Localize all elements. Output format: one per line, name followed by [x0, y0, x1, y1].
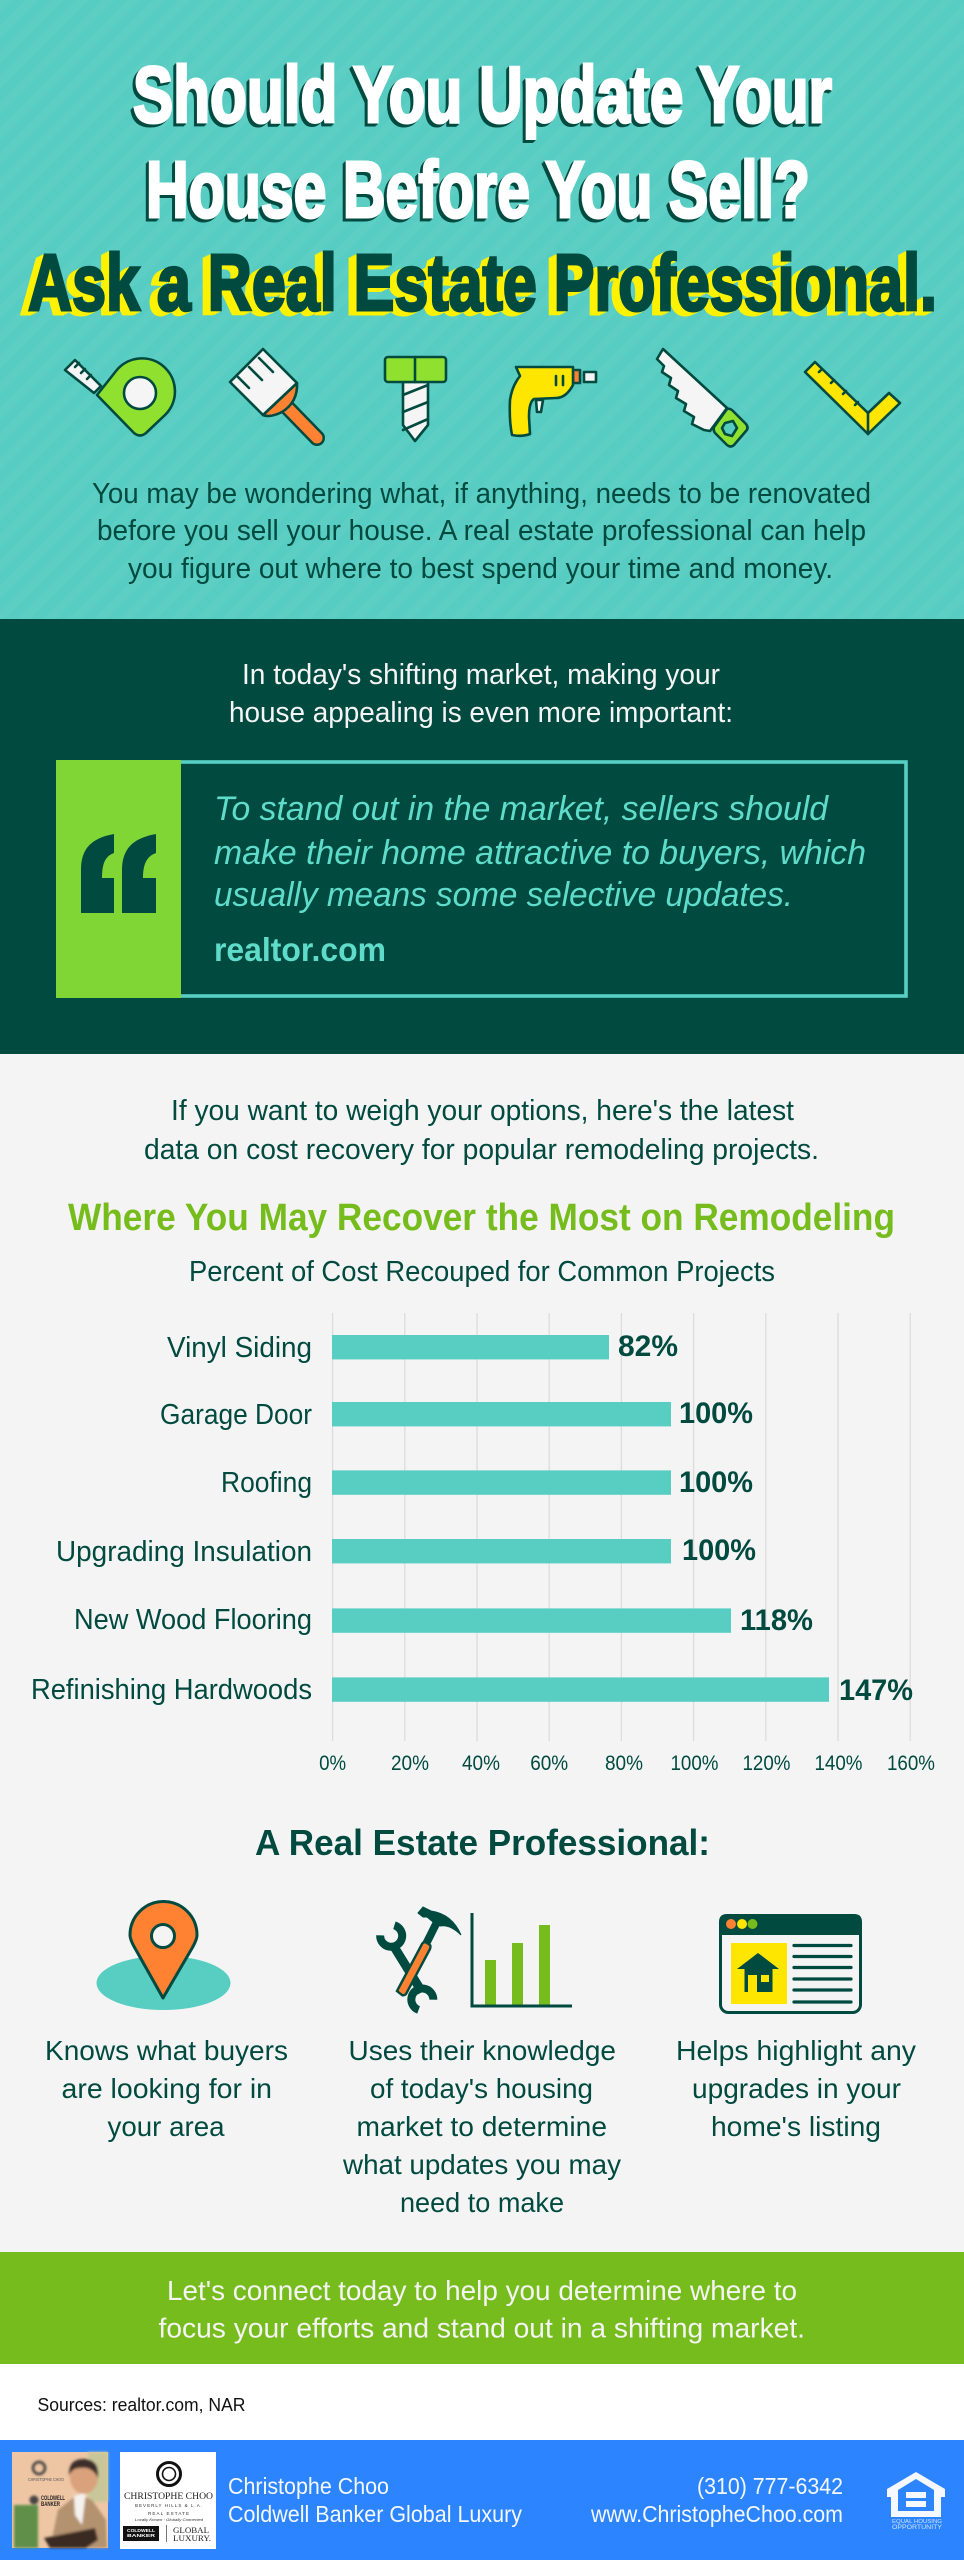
contact details: www.ChristopheChoo.com: [590, 2501, 843, 2527]
quote intro text: house appealing is even more important:: [229, 697, 733, 729]
text: helps highlight: Helps highlight any: [676, 2035, 916, 2066]
bar chart: Upgrading Insulation: [56, 1536, 312, 1568]
icon: equal housing opportunity: EQUAL HOUSING: [892, 2519, 942, 2525]
quote source: realtor.com: [214, 931, 386, 968]
bar chart: 140%: [814, 1751, 862, 1775]
logo card: CHRISTOPHE CHOO: [124, 2491, 214, 2501]
data intro text: [144, 1095, 819, 1166]
quote text: usually means some selective updates.: [214, 876, 793, 914]
logo card: BEVERLY HILLS & L.A.: [135, 2503, 202, 2508]
panel: data and benefits: [0, 1054, 964, 2252]
logo card: Locally Known · Globally Connected: [135, 2518, 204, 2522]
panel: header: [0, 0, 964, 619]
quote intro text: [229, 659, 733, 729]
agent name: [228, 2473, 522, 2527]
chart title: Where You May Recover the Most on Remodeling: [68, 1197, 895, 1239]
bar chart: 100%: [670, 1751, 718, 1775]
icon: browser listing: [719, 1914, 862, 2012]
agent photo: BANKER: [41, 2501, 60, 2508]
bar chart: Garage Door: [160, 1399, 312, 1431]
icon: hand saw: [657, 349, 748, 446]
icon: screw: [385, 357, 446, 441]
intro paragraph: you figure out where to best spend your time and money.: [128, 553, 833, 585]
data intro text: If you want to weigh your options, here's the latest: [171, 1095, 794, 1127]
panel: sources: [0, 2364, 964, 2440]
bar chart: 80%: [605, 1751, 643, 1775]
bar chart: 147%: [839, 1674, 913, 1707]
chart subtitle: Percent of Cost Recouped for Common Projects: [189, 1256, 775, 1288]
text: knows what buyers: your area: [108, 2111, 225, 2142]
logo card: BANKER: [127, 2533, 156, 2538]
text: knows what buyers: Knows what buyers: [45, 2035, 288, 2066]
text: uses their knowledge: need to make: [400, 2187, 564, 2218]
bar chart: 100%: [682, 1534, 756, 1567]
bar chart: [31, 1313, 935, 1775]
contact details: [590, 2473, 843, 2527]
icon: equal housing opportunity: [887, 2472, 945, 2531]
logo card: REAL ESTATE: [148, 2511, 189, 2516]
bar chart: 160%: [887, 1751, 935, 1775]
panel: footer: [0, 2440, 964, 2560]
contact details: (310) 777-6342: [697, 2473, 843, 2499]
quote intro text: In today's shifting market, making your: [242, 659, 720, 691]
panel: call to action: Let's connect today to help you determine where to: [167, 2275, 797, 2306]
agent photo: [12, 2452, 108, 2548]
quote text: To stand out in the market, sellers should: [214, 790, 829, 828]
agent name: Coldwell Banker Global Luxury: [228, 2501, 522, 2527]
agent photo: COLDWELL: [41, 2495, 65, 2502]
icon: carpenter square: [805, 362, 900, 434]
bar chart: Vinyl Siding: [167, 1332, 312, 1364]
heading: a real estate professional: A Real Estate Professional:: [255, 1822, 710, 1863]
text: knows what buyers: [45, 2035, 288, 2142]
bar chart: 100%: [679, 1397, 753, 1430]
bar chart: 100%: [679, 1466, 753, 1499]
quote text: [214, 790, 866, 914]
panel: call to action: focus your efforts and stand out in a shifting market.: [158, 2312, 805, 2344]
logo card: [120, 2452, 216, 2549]
bar chart: New Wood Flooring: [74, 1604, 312, 1636]
text: uses their knowledge: what updates you may: [342, 2149, 621, 2180]
intro paragraph: [92, 478, 871, 585]
logo card: GLOBAL: [173, 2526, 209, 2535]
text: uses their knowledge: market to determine: [356, 2111, 607, 2142]
text: uses their knowledge: [342, 2035, 621, 2218]
bar chart: Roofing: [221, 1467, 312, 1499]
text: helps highlight: home's listing: [711, 2111, 881, 2142]
text: uses their knowledge: of today's housing: [370, 2073, 593, 2104]
data intro text: data on cost recovery for popular remodeling projects.: [144, 1134, 819, 1166]
bar chart: 120%: [742, 1751, 790, 1775]
text: helps highlight: [676, 2035, 916, 2142]
quote text: make their home attractive to buyers, which: [214, 834, 866, 872]
text: uses their knowledge: Uses their knowledge: [348, 2035, 616, 2066]
logo card: LUXURY.: [173, 2534, 211, 2543]
panel: sources: Sources: realtor.com, NAR: [38, 2395, 246, 2415]
logo card: COLDWELL: [127, 2528, 155, 2533]
panel: call to action: [0, 2252, 964, 2364]
icon: location pin: [96, 1902, 230, 2010]
panel: quote section: [0, 619, 964, 1054]
bar chart: 82%: [618, 1330, 678, 1363]
bar chart: 118%: [740, 1604, 813, 1637]
intro paragraph: before you sell your house. A real estate professional can help: [97, 515, 866, 547]
icon: quotation marks: [81, 834, 156, 913]
icon: equal housing opportunity: OPPORTUNITY: [892, 2525, 942, 2531]
bar chart: Refinishing Hardwoods: [31, 1674, 312, 1706]
bar chart: 0%: [319, 1751, 346, 1775]
icon: tools and bar chart: [379, 1907, 572, 2011]
icon: measuring tape: [65, 358, 175, 436]
callout: quote box: [56, 760, 906, 998]
bar chart: 40%: [462, 1751, 500, 1775]
intro paragraph: You may be wondering what, if anything, needs to be renovated: [92, 478, 871, 510]
bar chart: 20%: [391, 1751, 429, 1775]
agent photo: CHRISTOPHE CHOO: [28, 2477, 64, 2482]
icon: drill: [510, 367, 596, 436]
agent name: Christophe Choo: [228, 2473, 389, 2499]
bar chart: 60%: [530, 1751, 568, 1775]
icon: paint brush: [230, 349, 317, 438]
text: knows what buyers: are looking for in: [62, 2073, 272, 2104]
text: helps highlight: upgrades in your: [692, 2073, 901, 2104]
